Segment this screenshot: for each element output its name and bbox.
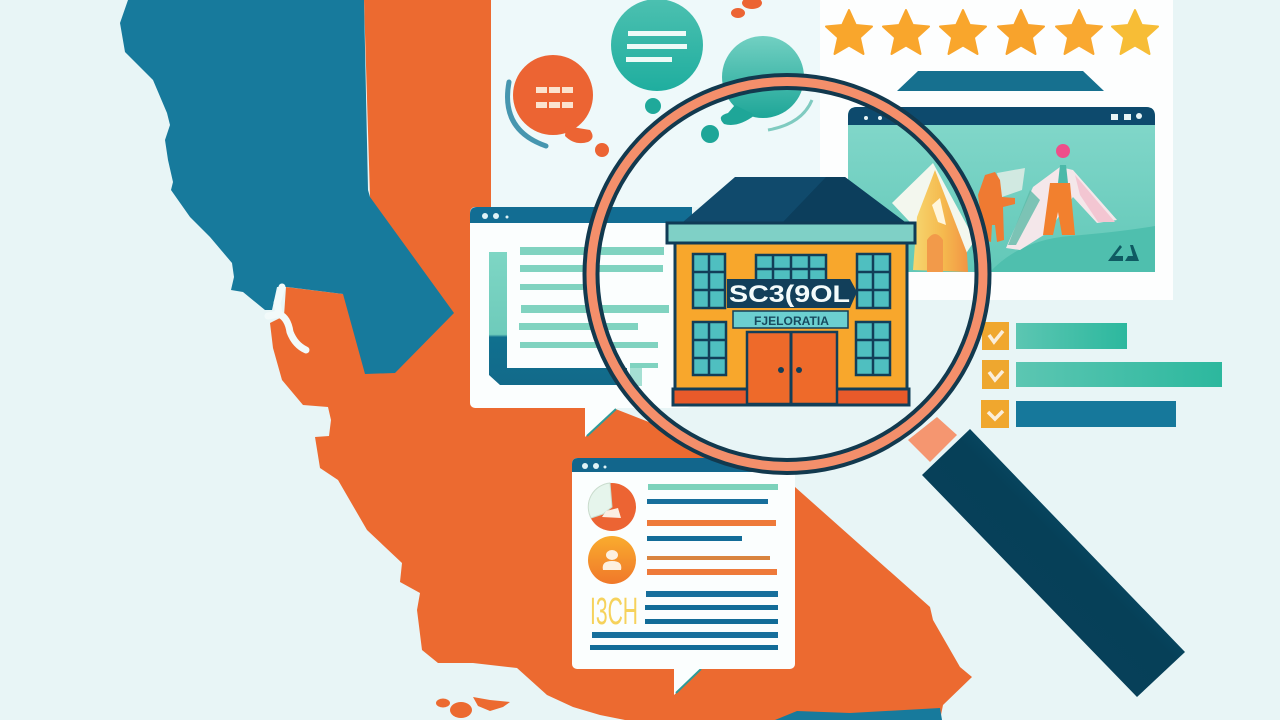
panel: left browser card — [470, 207, 692, 437]
illustration: yellow tent — [913, 170, 968, 272]
checklist row 2 — [982, 360, 1222, 389]
magnifying glass ring — [591, 82, 983, 466]
map: blue southern strip — [775, 708, 942, 720]
map: orange southern and eastern California — [270, 0, 972, 720]
decorative orange dots at top — [731, 0, 762, 18]
illustration: tent arch — [927, 234, 943, 272]
school building — [667, 177, 915, 405]
map: channel islands — [436, 697, 510, 718]
school cornice — [667, 223, 915, 243]
map: blue northern California — [120, 0, 454, 374]
star rating — [826, 10, 1158, 54]
report callout tail — [674, 665, 702, 695]
panel: speech bubbles backdrop — [491, 0, 820, 207]
school sub sign: FJELORATIA — [754, 314, 829, 328]
checklist row 3 — [981, 400, 1176, 428]
illustration: person left — [978, 168, 1025, 242]
card L-shaped bar — [489, 252, 627, 385]
illustration: white tent backdrop — [892, 163, 975, 270]
panel: bottom report card — [572, 458, 795, 695]
map: San Francisco bay channel — [268, 287, 306, 350]
speech bubble: light teal — [701, 36, 812, 143]
report text lines — [590, 484, 778, 650]
report yellow caption: I3CH — [590, 591, 638, 633]
report avatar — [588, 536, 636, 584]
illustration: small dark mark — [1108, 245, 1139, 261]
school base — [673, 389, 909, 405]
panel: reviews and photo card — [820, 0, 1173, 300]
browser window: photo of tent and people — [848, 107, 1155, 272]
heading bar: trapezoid — [897, 71, 1104, 91]
school sub sign — [733, 311, 848, 328]
school wall — [675, 243, 907, 389]
school doors — [747, 332, 837, 404]
card callout tail — [585, 405, 617, 437]
school name sign: SC3(9OL — [729, 281, 850, 308]
checklist — [981, 322, 1222, 428]
school roof — [683, 177, 905, 222]
checklist row 1 — [982, 322, 1127, 350]
report pie chart — [588, 483, 636, 531]
speech bubble: orange — [508, 55, 609, 157]
illustration: person right with cloth — [1006, 144, 1117, 250]
speech bubble: teal with text lines — [611, 0, 703, 114]
card text lines — [519, 247, 669, 386]
school windows — [693, 254, 890, 375]
magnifying glass handle — [908, 417, 1185, 697]
